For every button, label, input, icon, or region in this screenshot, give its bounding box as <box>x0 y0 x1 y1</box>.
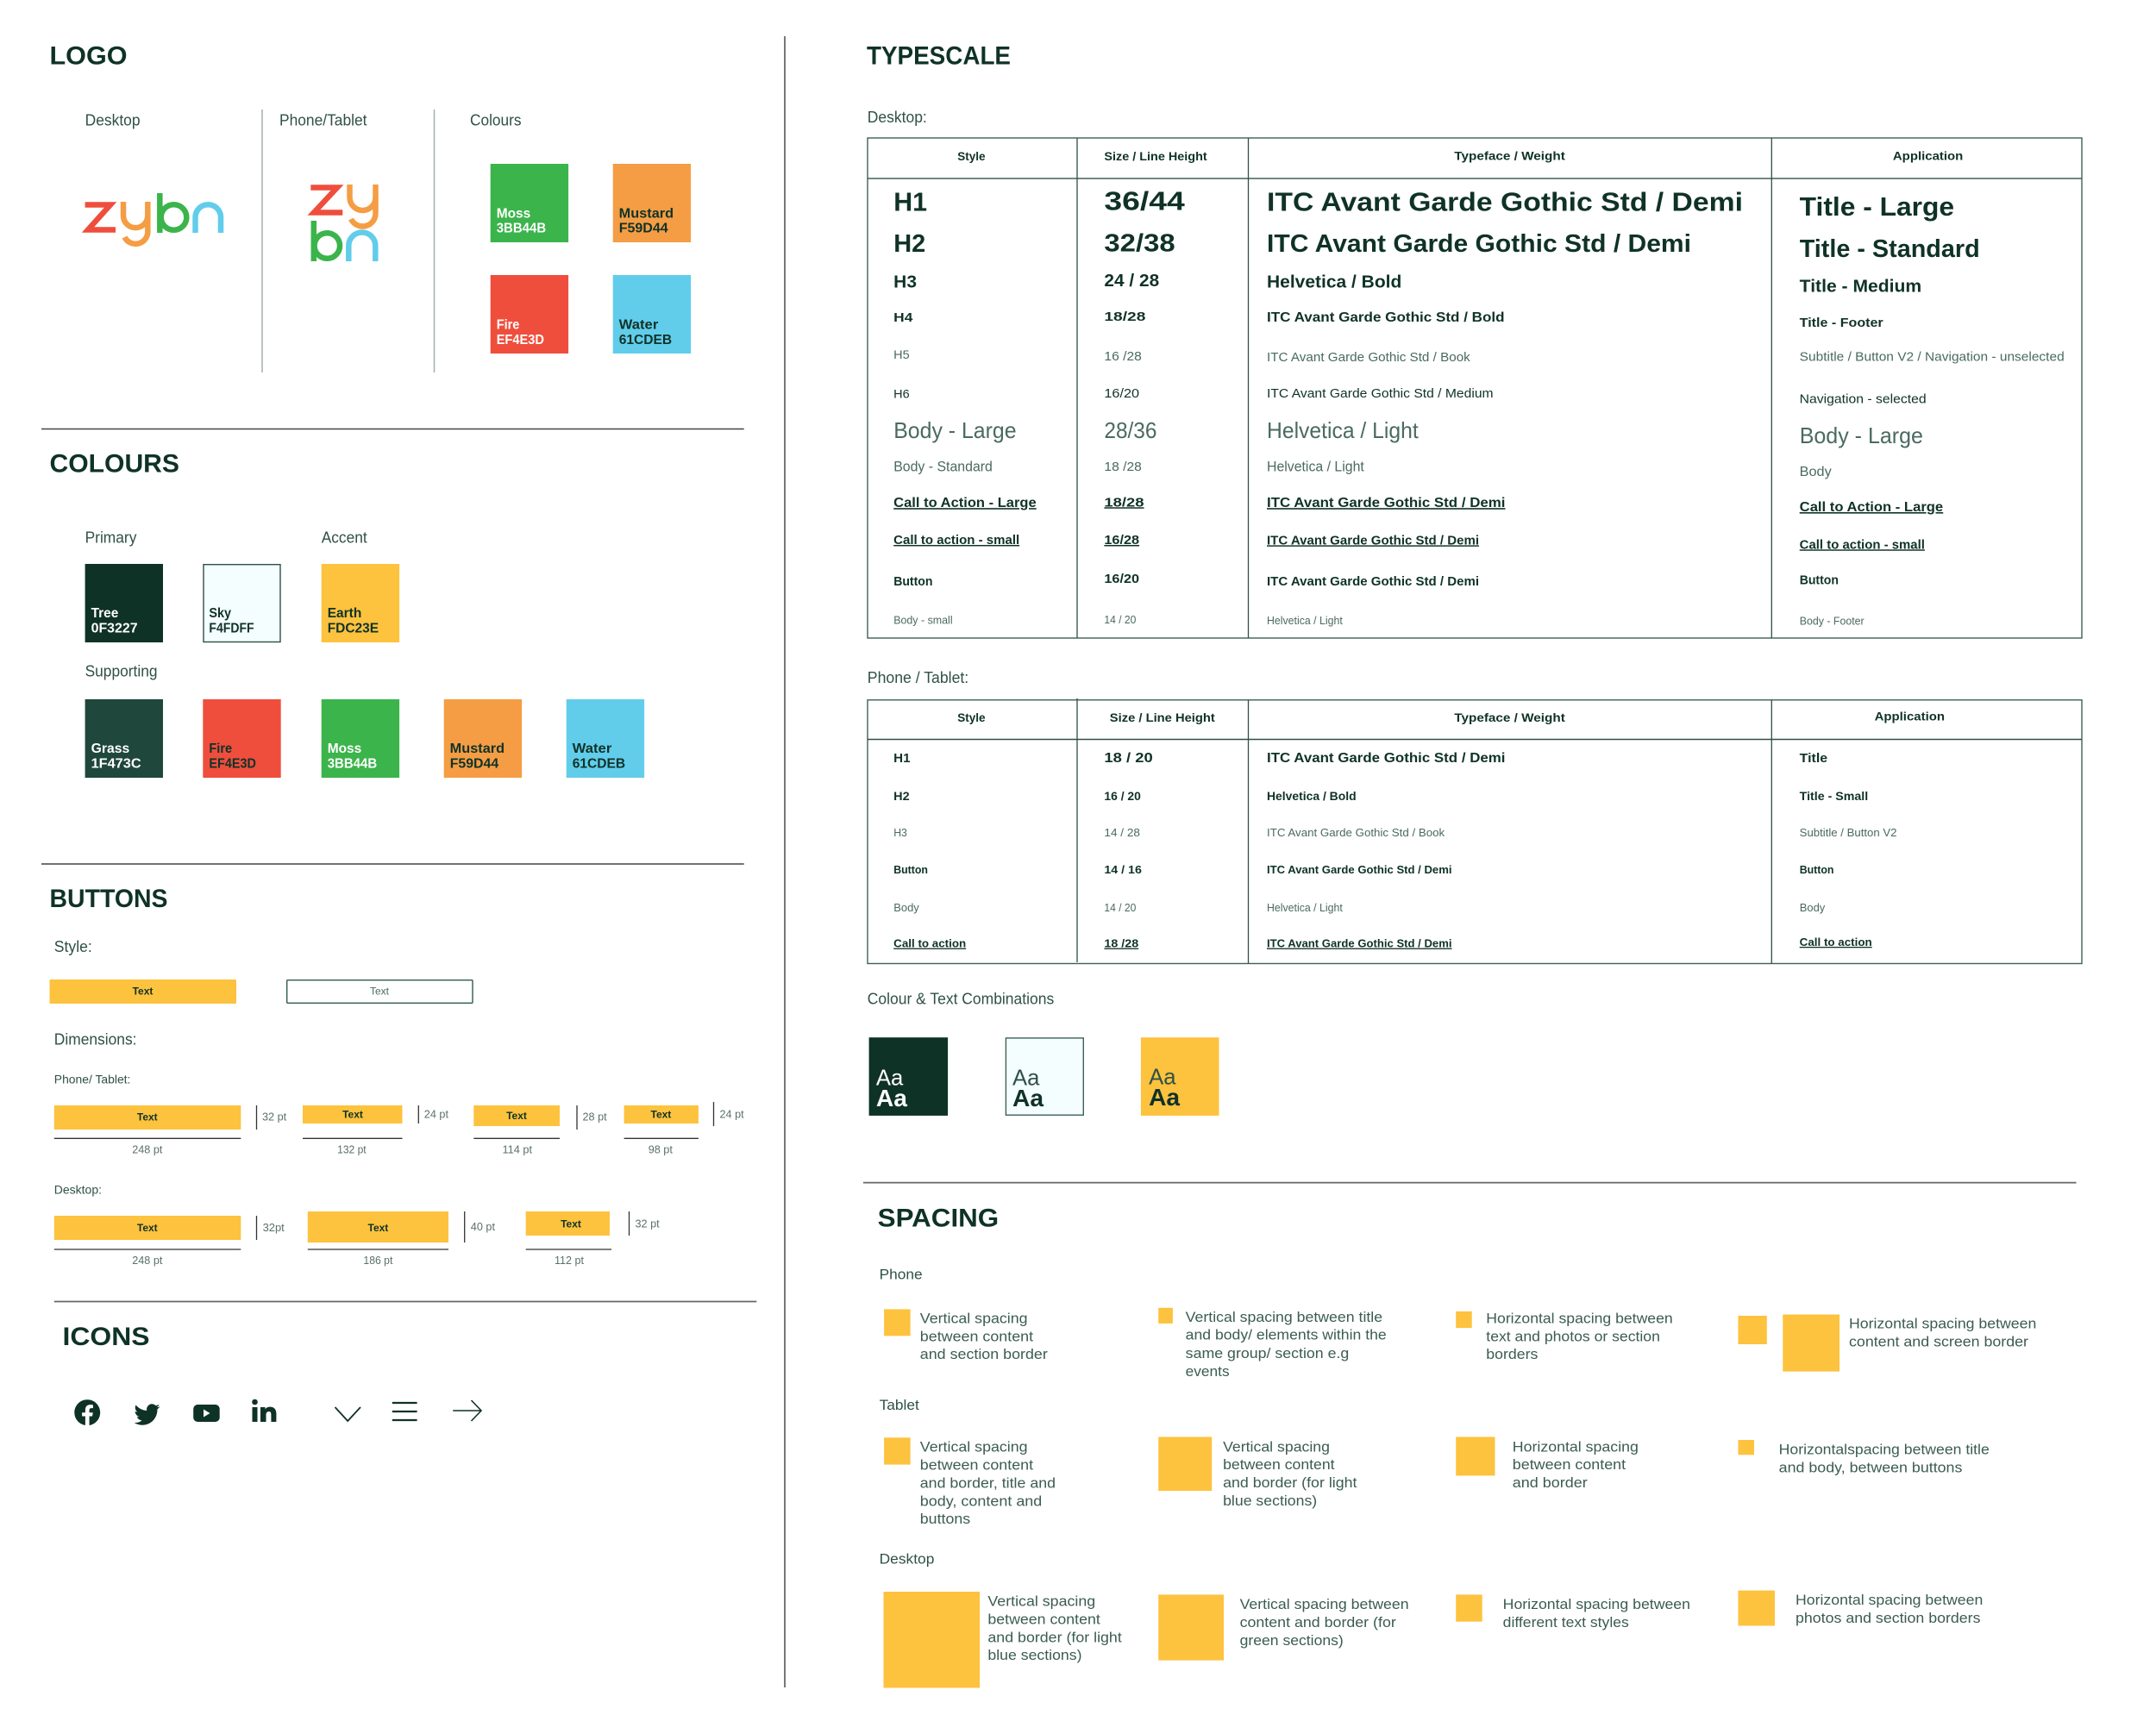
spacing item: desktop horizontal photos <box>1739 1591 1983 1626</box>
button spec: 132 x 24: 132 pt <box>337 1143 367 1155</box>
spacing item: tablet horizontal title: and body, between buttons <box>1779 1459 1962 1475</box>
column: size and line height: 18 /28 <box>1104 460 1142 474</box>
button spec: desktop 112 x 32: 32 pt <box>635 1217 660 1230</box>
spacing item: phone vertical content: and section border <box>920 1346 1048 1362</box>
spacing item: tablet vertical content: body, content and <box>920 1493 1042 1509</box>
swatch: grass <box>85 699 163 778</box>
column: application: Navigation - selected <box>1800 392 1927 406</box>
button spec: desktop 186 x 40: 186 pt <box>363 1254 393 1267</box>
column: application: Title - Large <box>1800 191 1954 222</box>
column: size and line height: 24 / 28 <box>1104 272 1159 291</box>
table header: Application <box>1875 710 1945 723</box>
column: size and line height: 14 / 20 <box>1104 613 1136 626</box>
label: phone/tablet dimensions: Phone/ Tablet: <box>54 1073 130 1086</box>
spacing item: tablet vertical content <box>884 1437 1056 1527</box>
spacing item: tablet vertical blue sections: Vertical spacing <box>1223 1438 1330 1455</box>
column: style: H2 <box>893 230 925 258</box>
column: size and line height: 18 /28 <box>1104 937 1138 950</box>
heading: typescale: TYPESCALE <box>867 41 1011 71</box>
spacing item: desktop vertical blue sections: Vertical spacing <box>987 1593 1095 1610</box>
button: primary style <box>50 980 236 1004</box>
column: application <box>1800 751 1897 948</box>
swatch: tree: 0F3227 <box>91 621 138 635</box>
swatch: tree <box>85 564 163 642</box>
table header: Application <box>1893 148 1963 162</box>
swatch: water: Water <box>573 742 611 756</box>
heading: colours: COLOURS <box>50 450 179 478</box>
swatch: sky text combination: Aa <box>1012 1065 1040 1091</box>
swatch: mustard <box>444 699 522 778</box>
button spec: 98 x 24: Text <box>650 1109 671 1121</box>
spacing item: phone vertical content: Vertical spacing <box>920 1311 1028 1326</box>
button spec: 248 x 32: 32 pt <box>262 1111 287 1123</box>
button spec: 248 x 32 <box>54 1105 287 1155</box>
column: style: H2 <box>893 789 910 803</box>
button: primary style: Text <box>133 985 153 997</box>
column: style: H4 <box>893 311 912 325</box>
icon: menu <box>392 1403 417 1420</box>
column: typeface and weight: Helvetica / Light <box>1267 459 1364 474</box>
button spec: desktop 186 x 40: 40 pt <box>471 1220 495 1233</box>
column: application: Button <box>1800 574 1839 588</box>
swatch: water <box>567 699 644 778</box>
swatch: earth: FDC23E <box>328 621 379 635</box>
spacing item: desktop vertical green sections <box>1158 1594 1409 1661</box>
spacing item: tablet vertical blue sections <box>1158 1436 1357 1509</box>
button spec: 98 x 24: 98 pt <box>649 1143 673 1155</box>
column: size and line height: 18/28 <box>1104 495 1144 510</box>
button spec: desktop 112 x 32: 112 pt <box>555 1254 584 1267</box>
swatch: tree text combination: Aa <box>876 1085 907 1111</box>
column: typeface and weight: ITC Avant Garde Gothic Std / Bold <box>1267 310 1505 325</box>
label: desktop logo: Desktop <box>85 111 141 128</box>
icon: chevron down <box>335 1407 360 1421</box>
spacing item: phone vertical content: between content <box>920 1328 1033 1344</box>
column: style: H6 <box>893 388 910 401</box>
column: typeface and weight: ITC Avant Garde Gothic Std / Demi <box>1267 937 1452 950</box>
spacing item: desktop horizontal photos: photos and section borders <box>1796 1610 1980 1626</box>
panel: buttons <box>50 885 744 1267</box>
label: phone/tablet logo: Phone/Tablet <box>279 111 367 128</box>
swatch: moss: Moss <box>328 742 361 756</box>
column: size and line height: 16 / 20 <box>1104 789 1141 803</box>
button spec: 248 x 32: Text <box>137 1111 158 1123</box>
spacing item: tablet horizontal title <box>1739 1440 1990 1475</box>
label: phone: Phone <box>880 1266 923 1283</box>
spacing item: desktop vertical blue sections <box>883 1592 1122 1688</box>
button spec: desktop 248 x 32: 32pt <box>263 1221 285 1234</box>
heading: buttons: BUTTONS <box>50 885 167 913</box>
spacing item: phone horizontal text: text and photos or section <box>1486 1328 1660 1344</box>
column: size and line height: 14 / 28 <box>1104 826 1140 839</box>
column: typeface and weight: ITC Avant Garde Gothic Std / Demi <box>1267 186 1743 217</box>
spacing item: phone vertical title <box>1158 1308 1387 1380</box>
swatch: earth text combination <box>1141 1037 1219 1116</box>
column: style: H5 <box>893 348 910 361</box>
swatch: moss <box>322 699 399 778</box>
swatch: earth <box>322 564 399 642</box>
button spec: 114 x 28: 28 pt <box>583 1111 607 1123</box>
column: application: Body <box>1800 465 1832 479</box>
swatch: mustard: F59D44 <box>619 222 668 236</box>
button spec: 98 x 24 <box>624 1102 744 1155</box>
column: application <box>1800 191 2065 628</box>
spacing item: phone horizontal screen border: Horizontal spacing between <box>1849 1316 2036 1331</box>
column: style: Body - Large <box>893 417 1017 443</box>
button spec: desktop 248 x 32: 248 pt <box>132 1254 163 1267</box>
heading: icons: ICONS <box>62 1323 150 1351</box>
spacing item: phone horizontal text: borders <box>1486 1346 1538 1362</box>
column: typeface and weight: ITC Avant Garde Gothic Std / Book <box>1267 351 1471 365</box>
column: style: Body <box>893 901 919 914</box>
spacing item: tablet vertical content: buttons <box>920 1511 970 1527</box>
spacing item: desktop horizontal text styles: different text styles <box>1503 1614 1629 1631</box>
spacing item: phone vertical content <box>884 1309 1048 1362</box>
spacing item: phone vertical title: same group/ section e.g <box>1186 1345 1349 1361</box>
column: application: Subtitle / Button V2 <box>1800 826 1897 839</box>
column: style <box>893 751 966 950</box>
swatch: earth text combination: Aa <box>1149 1064 1176 1090</box>
column: typeface and weight: Helvetica / Light <box>1267 901 1343 914</box>
spacing item: tablet vertical blue sections: between content <box>1223 1456 1335 1473</box>
column: style: Call to action <box>893 937 966 950</box>
icon: twitter <box>135 1404 160 1425</box>
logo: desktop <box>85 193 221 244</box>
button spec: desktop 248 x 32 <box>54 1216 285 1267</box>
column: style: H3 <box>893 272 917 291</box>
table: phone/tablet typescale <box>868 698 2082 964</box>
column: application: Subtitle / Button V2 / Navigation - unselected <box>1800 350 2065 364</box>
label: colour and text combinations: Colour & Text Combinations <box>868 990 1054 1007</box>
swatch: earth: Earth <box>328 606 361 621</box>
spacing item: tablet horizontal border <box>1456 1436 1639 1491</box>
button: outline style <box>287 980 473 1003</box>
swatch: fire: EF4E3D <box>497 333 544 347</box>
swatch: mustard <box>613 164 691 242</box>
column: application: Call to action - small <box>1800 538 1925 552</box>
column: application: Body - Footer <box>1800 614 1865 628</box>
button spec: desktop 248 x 32: Text <box>137 1222 158 1234</box>
swatch: fire: Fire <box>497 318 519 333</box>
button spec: desktop 186 x 40: Text <box>367 1222 388 1234</box>
swatch: water: 61CDEB <box>573 756 625 771</box>
spacing item: tablet horizontal border: between content <box>1513 1456 1626 1473</box>
column: typeface and weight: Helvetica / Light <box>1267 614 1343 627</box>
icon: youtube <box>193 1405 220 1422</box>
swatch: water <box>613 275 691 354</box>
table: desktop typescale <box>868 138 2082 638</box>
swatch: sky <box>204 565 280 642</box>
table header <box>957 710 1945 724</box>
swatch: mustard: F59D44 <box>450 756 498 771</box>
column: application: Title - Medium <box>1800 277 1921 296</box>
swatch: fire: EF4E3D <box>209 756 256 771</box>
spacing item: desktop vertical blue sections: between content <box>987 1611 1100 1628</box>
swatch: tree text combination: Aa <box>876 1065 904 1091</box>
column: size and line height: 16/28 <box>1104 533 1139 548</box>
label: tablet: Tablet <box>880 1397 919 1413</box>
swatch: moss: Moss <box>497 206 530 221</box>
swatch: fire <box>203 699 281 778</box>
panel: typescale <box>867 41 2082 1116</box>
column: size and line height: 18 / 20 <box>1104 751 1153 766</box>
spacing item: phone horizontal text <box>1456 1311 1673 1362</box>
heading: logo: LOGO <box>50 41 128 71</box>
logo: phone/tablet <box>310 185 376 261</box>
spacing item: phone vertical title: and body/ elements within the <box>1186 1327 1387 1343</box>
swatch: fire: Fire <box>209 742 232 756</box>
column: application: Body - Large <box>1800 422 1923 448</box>
button spec: 248 x 32: 248 pt <box>132 1143 163 1155</box>
table header: Size / Line Height <box>1110 710 1215 724</box>
column: typeface and weight <box>1267 751 1506 950</box>
column: style <box>893 186 1037 626</box>
column: size and line height: 16/20 <box>1104 572 1139 586</box>
column: typeface and weight: ITC Avant Garde Gothic Std / Demi <box>1267 496 1506 510</box>
panel: colours <box>50 450 644 778</box>
swatch: tree: Tree <box>91 606 118 621</box>
column: typeface and weight: ITC Avant Garde Gothic Std / Demi <box>1267 575 1479 589</box>
swatch: moss: 3BB44B <box>328 756 377 771</box>
spacing item: phone horizontal screen border <box>1739 1314 2036 1372</box>
column: typeface and weight: ITC Avant Garde Gothic Std / Demi <box>1267 751 1506 766</box>
column: style: Call to Action - Large <box>893 496 1037 510</box>
swatch: moss <box>491 164 568 242</box>
panel: icons <box>62 1323 481 1425</box>
button spec: 98 x 24: 24 pt <box>719 1107 744 1121</box>
icon: facebook <box>74 1399 100 1425</box>
spacing item: phone horizontal screen border: content and screen border <box>1849 1333 2028 1349</box>
spacing item: desktop vertical green sections: Vertical spacing between <box>1240 1596 1409 1612</box>
panel: spacing <box>878 1204 2036 1688</box>
table header: Size / Line Height <box>1104 149 1207 163</box>
column: typeface and weight: Helvetica / Light <box>1267 417 1419 443</box>
column: style: Button <box>893 863 928 876</box>
button spec: desktop 186 x 40 <box>308 1211 495 1267</box>
label: accent: Accent <box>322 529 367 546</box>
spacing item: desktop vertical green sections: green sections) <box>1240 1632 1344 1649</box>
label: phone/tablet table: Phone / Tablet: <box>868 669 968 686</box>
label: dimensions: Dimensions: <box>54 1031 136 1048</box>
column: style: Body - Standard <box>893 459 993 474</box>
column: application: Title - Small <box>1800 789 1868 803</box>
heading: spacing: SPACING <box>878 1204 999 1232</box>
column: application: Call to Action - Large <box>1800 500 1943 515</box>
column: typeface and weight: ITC Avant Garde Gothic Std / Demi <box>1267 863 1452 876</box>
swatch: water: Water <box>619 318 658 333</box>
column: style: Button <box>893 575 933 589</box>
swatch: tree text combination <box>869 1037 948 1116</box>
spacing item: desktop vertical green sections: content and border (for <box>1240 1614 1396 1631</box>
spacing item: phone horizontal text: Horizontal spacing between <box>1486 1311 1673 1326</box>
spacing item: tablet horizontal title: Horizontalspacing between title <box>1779 1442 1990 1457</box>
column: size and line height <box>1104 186 1186 626</box>
swatch: sky text combination <box>1006 1038 1083 1115</box>
button spec: 132 x 24 <box>303 1105 448 1155</box>
table header: Typeface / Weight <box>1454 148 1565 162</box>
swatch: sky: Sky <box>209 606 231 621</box>
spacing item: desktop horizontal text styles <box>1456 1594 1690 1631</box>
column: style: H1 <box>893 186 927 217</box>
column: size and line height: 16 /28 <box>1104 350 1142 364</box>
label: desktop dimensions: Desktop: <box>54 1183 102 1197</box>
swatch: sky text combination: Aa <box>1012 1085 1044 1111</box>
column: size and line height: 36/44 <box>1104 186 1186 216</box>
column: typeface and weight: ITC Avant Garde Gothic Std / Demi <box>1267 230 1691 258</box>
button spec: 132 x 24: Text <box>342 1109 363 1121</box>
button spec: desktop 112 x 32 <box>526 1211 660 1267</box>
column: typeface and weight: Helvetica / Bold <box>1267 789 1357 803</box>
column: application: Title - Standard <box>1800 235 1980 263</box>
button spec: 114 x 28: 114 pt <box>502 1143 532 1155</box>
column: application: Title - Footer <box>1800 316 1883 330</box>
spacing item: desktop vertical blue sections: blue sections) <box>987 1647 1081 1663</box>
table header: Style <box>957 149 986 163</box>
column: style: H1 <box>893 751 911 766</box>
column: typeface and weight: Helvetica / Bold <box>1267 272 1401 291</box>
label: primary: Primary <box>85 529 136 546</box>
label: desktop: Desktop <box>880 1550 934 1567</box>
label: logo colours: Colours <box>470 111 521 128</box>
column: typeface and weight: ITC Avant Garde Gothic Std / Book <box>1267 826 1445 839</box>
column: application: Title <box>1800 751 1827 766</box>
column: typeface and weight: ITC Avant Garde Gothic Std / Demi <box>1267 534 1479 548</box>
swatch: grass: Grass <box>91 742 129 756</box>
label: style: Style: <box>54 938 92 955</box>
column: application: Body <box>1800 901 1826 914</box>
spacing item: desktop horizontal text styles: Horizontal spacing between <box>1503 1596 1690 1612</box>
swatch: mustard: Mustard <box>450 742 505 756</box>
label: desktop table: Desktop: <box>868 109 927 126</box>
column: size and line height: 18/28 <box>1104 310 1145 324</box>
table header: Typeface / Weight <box>1454 710 1565 724</box>
label: supporting: Supporting <box>85 663 157 680</box>
button spec: 114 x 28: Text <box>506 1110 527 1122</box>
spacing item: tablet vertical content: Vertical spacing <box>920 1439 1028 1455</box>
spacing item: tablet vertical content: between content <box>920 1457 1033 1474</box>
swatch: water: 61CDEB <box>619 333 672 347</box>
column: size and line height: 14 / 20 <box>1104 901 1136 914</box>
icon: linkedin <box>252 1399 276 1422</box>
button spec: 132 x 24: 24 pt <box>424 1107 448 1121</box>
spacing item: desktop horizontal photos: Horizontal spacing between <box>1796 1592 1983 1608</box>
button spec: desktop 112 x 32: Text <box>561 1217 581 1230</box>
column: size and line height: 14 / 16 <box>1104 863 1142 876</box>
column: size and line height: 32/38 <box>1104 229 1175 257</box>
swatch: mustard: Mustard <box>619 206 674 221</box>
column: size and line height <box>1104 751 1153 950</box>
column: style: Body - small <box>893 613 953 626</box>
swatch: sky: F4FDFF <box>209 621 254 635</box>
swatch: grass: 1F473C <box>91 756 141 771</box>
column: typeface and weight: ITC Avant Garde Gothic Std / Medium <box>1267 387 1494 401</box>
swatch: moss: 3BB44B <box>497 222 546 236</box>
table header <box>957 148 1963 163</box>
icon: arrow right <box>453 1400 481 1421</box>
spacing item: tablet vertical blue sections: and border (for light <box>1223 1474 1357 1491</box>
column: application: Call to action <box>1800 936 1872 948</box>
spacing item: tablet horizontal border: Horizontal spacing <box>1513 1438 1639 1455</box>
spacing item: desktop vertical blue sections: and border (for light <box>987 1629 1122 1645</box>
table header: Style <box>957 710 986 724</box>
column: size and line height: 28/36 <box>1104 417 1156 443</box>
column: style: H3 <box>893 826 907 839</box>
column: style: Call to action - small <box>893 534 1019 548</box>
column: size and line height: 16/20 <box>1104 387 1139 401</box>
spacing item: phone vertical title: events <box>1186 1363 1230 1380</box>
spacing item: tablet vertical content: and border, title and <box>920 1474 1056 1491</box>
spacing item: tablet vertical blue sections: blue sections) <box>1223 1493 1317 1509</box>
swatch: fire <box>491 275 568 354</box>
panel: logo <box>50 41 691 372</box>
swatch: earth text combination: Aa <box>1149 1084 1181 1111</box>
button: outline style: Text <box>370 985 390 997</box>
column: typeface and weight <box>1267 186 1743 627</box>
column: application: Button <box>1800 863 1834 876</box>
spacing item: tablet horizontal border: and border <box>1513 1474 1588 1491</box>
button spec: 114 x 28 <box>473 1105 607 1155</box>
spacing item: phone vertical title: Vertical spacing between title <box>1186 1309 1382 1325</box>
